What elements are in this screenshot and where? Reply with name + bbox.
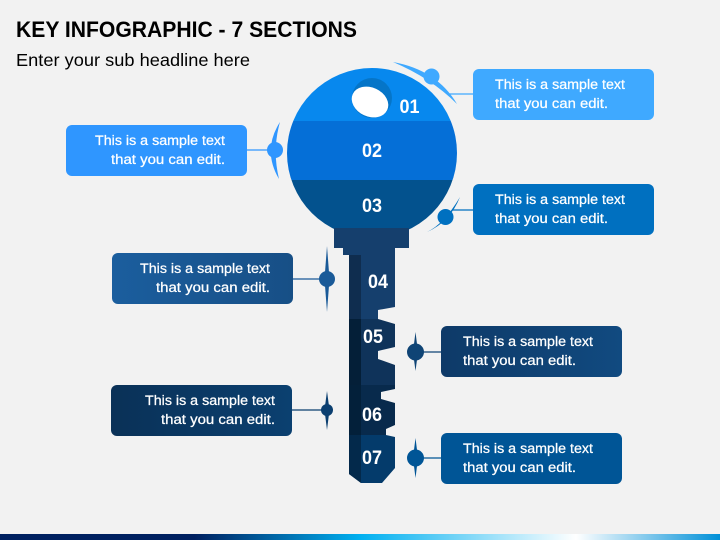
section 06 shaft (349, 385, 395, 435)
key illustration (280, 60, 465, 483)
callout 06: that you can edit. (161, 412, 275, 427)
callout 04: This is a sample text (140, 261, 270, 276)
callout 06: This is a sample text (145, 393, 275, 408)
callout 03: that you can edit. (495, 211, 608, 226)
callout 02: that you can edit. (111, 152, 225, 167)
callout 05: This is a sample text (463, 334, 593, 349)
callout 03: This is a sample text (495, 192, 625, 207)
callout 04: that you can edit. (156, 280, 270, 295)
callout 01 (393, 62, 654, 120)
callout 01: This is a sample text (495, 77, 625, 92)
title: KEY INFOGRAPHIC - 7 SECTIONS (16, 17, 357, 42)
section 04 shaft (334, 228, 409, 319)
section 05 shaft (349, 319, 395, 385)
bottom gradient bar (0, 534, 720, 540)
callout 01: that you can edit. (495, 96, 608, 111)
callout 07: that you can edit. (463, 460, 576, 475)
number 06: 06 (362, 405, 382, 426)
callout 04 (112, 246, 335, 312)
section 07 shaft (349, 435, 395, 483)
number 04: 04 (368, 272, 388, 293)
callout 03 (427, 184, 654, 235)
callout 07 (407, 433, 622, 484)
key hole (347, 78, 393, 123)
subtitle: Enter your sub headline here (16, 50, 250, 70)
callout 05: that you can edit. (463, 353, 576, 368)
callout 02 (66, 122, 283, 179)
number 02: 02 (362, 141, 382, 162)
callout 02: This is a sample text (95, 133, 225, 148)
callout 07: This is a sample text (463, 441, 593, 456)
callout 06 (111, 385, 333, 436)
key head (287, 68, 457, 230)
number 05: 05 (363, 327, 383, 348)
callout 05 (407, 326, 622, 377)
number 07: 07 (362, 448, 382, 469)
number 03: 03 (362, 196, 382, 217)
number 01: 01 (400, 97, 420, 118)
